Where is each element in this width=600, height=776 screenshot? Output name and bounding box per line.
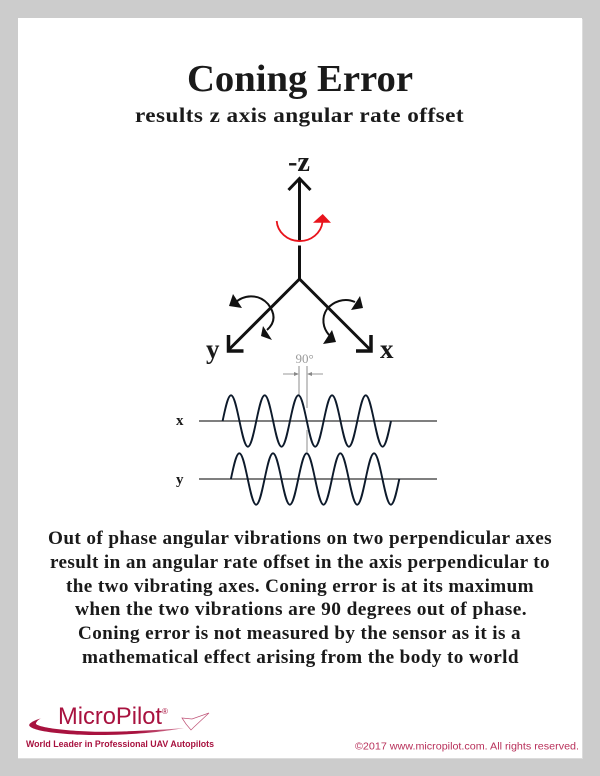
- logo swoosh: [29, 718, 184, 735]
- logo tagline: World Leader in Professional UAV Autopilots: [26, 739, 214, 749]
- x wave: [176, 395, 437, 447]
- body text: Coning error is not measured by the sensor as it is a: [78, 623, 521, 644]
- y label: y: [206, 334, 220, 364]
- z label: -z: [288, 147, 310, 178]
- y wave: y: [176, 472, 184, 488]
- x axis rotation arrows: [323, 296, 363, 344]
- body text: Out of phase angular vibrations on two perpendicular axes: [48, 528, 552, 549]
- logo airplane: [182, 713, 209, 730]
- title: Coning Error: [187, 58, 413, 100]
- logo wordmark: MicroPilot: [58, 703, 162, 730]
- phase waves chart: [176, 351, 437, 505]
- x axis arrow: [300, 279, 371, 351]
- 90 degree marker: [283, 351, 323, 452]
- z axis arrow: [288, 178, 310, 279]
- body text: [48, 528, 552, 668]
- 90 degree marker: 90°: [296, 351, 314, 366]
- registered mark: ®: [162, 707, 168, 716]
- body text: the two vibrating axes. Coning error is at its maximum: [66, 576, 534, 597]
- axis diagram: [206, 147, 394, 364]
- body text: result in an angular rate offset in the axis perpendicular to: [50, 552, 550, 573]
- y axis rotation arrows: [229, 294, 274, 340]
- copyright: ©2017 www.micropilot.com. All rights reserved.: [355, 740, 579, 752]
- x label: x: [380, 334, 394, 364]
- red rotation arrow: [277, 214, 331, 244]
- body text: mathematical effect arising from the body to world: [82, 647, 519, 668]
- y axis arrow: [228, 279, 300, 351]
- x wave: x: [176, 413, 184, 429]
- MicroPilot logo: [26, 703, 214, 749]
- body text: when the two vibrations are 90 degrees out of phase.: [75, 599, 527, 620]
- y wave: [176, 453, 437, 505]
- subtitle: results z axis angular rate offset: [135, 103, 464, 127]
